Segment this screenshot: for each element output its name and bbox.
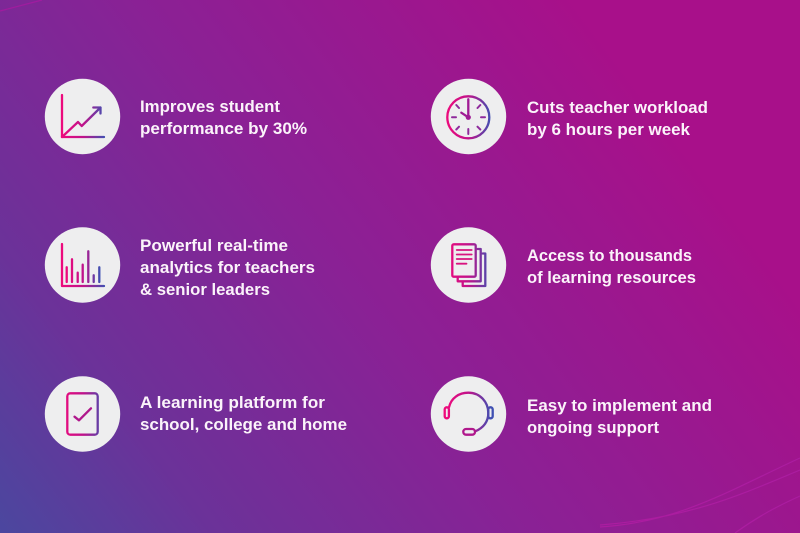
text: real-time analytics: analytics for teachers: [140, 259, 315, 277]
text: real-time analytics: & senior leaders: [140, 281, 270, 299]
item: real-time analytics: [45, 227, 315, 303]
item: learning platform: [45, 376, 347, 452]
text: improves student performance: performance by 30%: [140, 120, 307, 138]
text: learning platform: [140, 394, 347, 434]
text: easy to implement: [527, 397, 712, 437]
icon: clock: [431, 79, 506, 154]
item: easy to implement: [431, 376, 712, 452]
text: learning resources: of learning resources: [527, 269, 696, 287]
text: learning resources: [527, 247, 696, 287]
item: improves student performance: [45, 79, 307, 154]
icon: line chart: [45, 79, 120, 154]
icon: stacked documents: [431, 227, 506, 303]
text: improves student performance: [140, 98, 307, 138]
text: cuts teacher workload: by 6 hours per week: [527, 121, 691, 139]
text: easy to implement: ongoing support: [527, 419, 659, 437]
text: learning resources: Access to thousands: [527, 247, 692, 265]
text: learning platform: A learning platform for: [140, 394, 326, 412]
icon: headset: [431, 376, 506, 452]
icon: tablet with check: [45, 376, 120, 452]
text: improves student performance: Improves student: [140, 98, 281, 116]
text: easy to implement: Easy to implement and: [527, 397, 712, 415]
text: cuts teacher workload: [527, 99, 708, 139]
item: learning resources: [431, 227, 696, 303]
text: cuts teacher workload: Cuts teacher workload: [527, 99, 708, 117]
text: real-time analytics: [140, 237, 315, 299]
text: real-time analytics: Powerful real-time: [140, 237, 288, 255]
item: cuts teacher workload: [431, 79, 708, 154]
icon: bar chart: [45, 227, 120, 303]
text: learning platform: school, college and home: [140, 416, 347, 434]
